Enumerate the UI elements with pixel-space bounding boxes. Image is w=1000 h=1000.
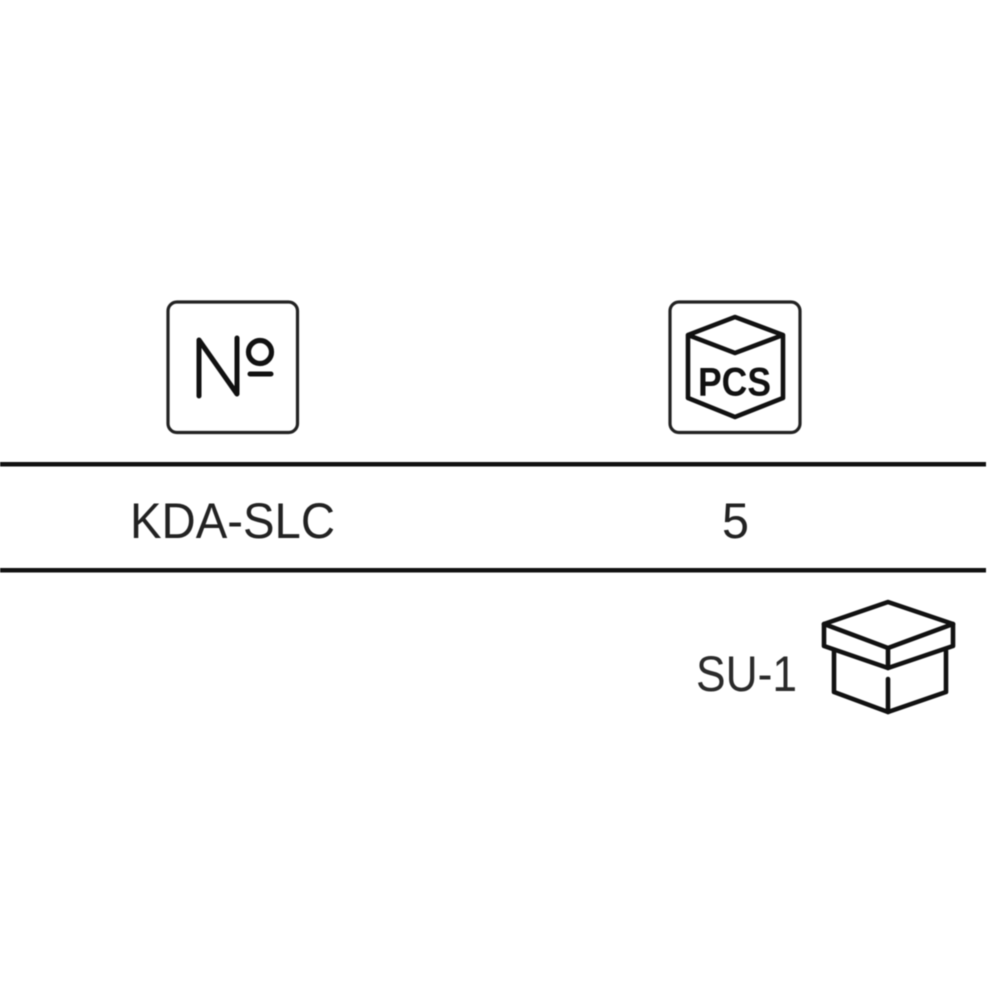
table rule bottom (0, 568, 986, 572)
icon: pieces per box (670, 302, 800, 432)
article number value: KDA-SLC (130, 493, 335, 549)
table rule top (0, 462, 986, 466)
pieces value: 5 (722, 493, 749, 549)
icon: pieces per box: PCS (698, 360, 771, 404)
icon: number sign (168, 302, 298, 432)
icon: box (824, 602, 953, 712)
sales unit label: SU-1 (696, 646, 797, 702)
